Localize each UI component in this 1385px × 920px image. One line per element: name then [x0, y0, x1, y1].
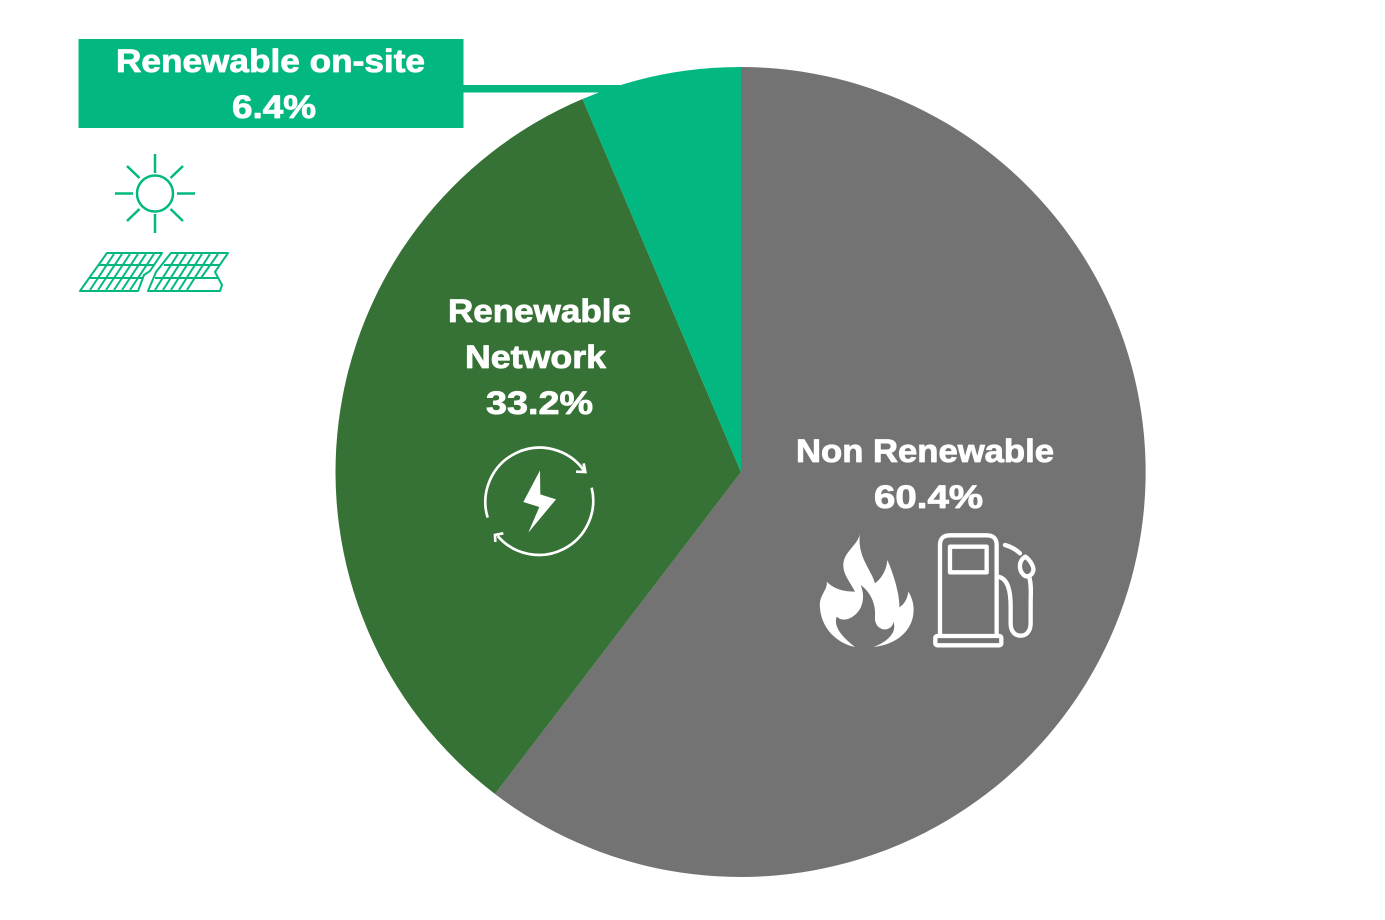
label: non renewable: Non Renewable — [796, 433, 1054, 469]
icon: sun — [115, 154, 195, 233]
pie slice: non renewable 60.4% — [495, 67, 1146, 877]
label: renewable network: Renewable — [448, 293, 631, 329]
label: renewable network — [448, 293, 631, 421]
pie slice: renewable network 33.2% — [336, 99, 741, 794]
pie slice: renewable on-site 6.4% — [582, 67, 741, 472]
label box: renewable on-site: Renewable on-site — [116, 43, 425, 79]
label box: renewable on-site — [78, 39, 464, 128]
icon: renewable electricity cycle — [485, 448, 593, 555]
connector line from label to slice — [460, 85, 620, 92]
label: non renewable: 60.4% — [874, 479, 983, 515]
label: renewable network: 33.2% — [486, 385, 593, 421]
icon: fuel pump — [935, 535, 1033, 645]
icon: flame — [820, 533, 914, 647]
label: renewable network: Network — [465, 339, 606, 375]
icon: solar panels — [80, 253, 228, 291]
label box: renewable on-site: 6.4% — [232, 89, 316, 125]
label: non renewable — [796, 433, 1054, 515]
